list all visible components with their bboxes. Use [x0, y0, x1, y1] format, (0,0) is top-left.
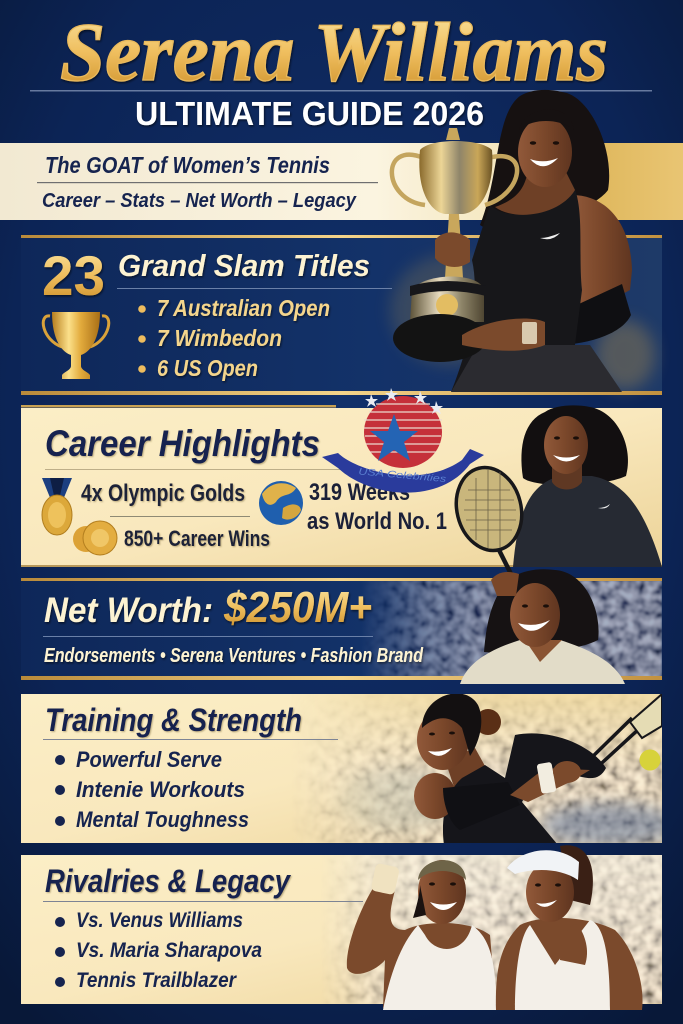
right player: [496, 845, 643, 1010]
icon: gold trophy: [43, 312, 109, 379]
photo: sisters smiling: [347, 845, 643, 1010]
skirt: [451, 345, 622, 392]
star emblem: [370, 414, 418, 461]
heading: rivalries and legacy: Rivalries & Legacy: [45, 863, 292, 899]
list: training: Intenie Workouts: [76, 777, 245, 802]
panel: net worth: [21, 569, 662, 684]
racket: [593, 694, 662, 764]
stat: olympic golds: 4x Olympic Golds: [81, 480, 245, 507]
stat: weeks at no. 1: [307, 479, 447, 535]
list: slam counts: 7 Wimbedon: [157, 325, 282, 351]
heading: career highlights: Career Highlights: [45, 423, 320, 464]
face: [518, 117, 572, 187]
title: Serena Williams: [60, 6, 608, 99]
stat: career wins: 850+ Career Wins: [124, 526, 270, 551]
racket: [448, 461, 530, 576]
heading: net worth: Net Worth:: [44, 591, 213, 630]
list: training: Powerful Serve: [76, 747, 222, 772]
hand holding racket: [491, 572, 519, 596]
list: rivalries: [55, 909, 262, 992]
big number 23: 23: [42, 244, 105, 307]
band heading: The GOAT of Women’s Tennis: [45, 152, 330, 178]
panel: rivalries and legacy: [21, 845, 662, 1010]
band: intro: [0, 143, 683, 220]
income sources: Endorsements • Serena Ventures • Fashion Brand: [44, 645, 424, 667]
torso and far sleeve: [443, 733, 606, 845]
panel: grand slam titles: [21, 235, 662, 395]
heading: net worth: [44, 583, 372, 632]
near sleeve: [443, 787, 456, 814]
hands: [435, 232, 470, 267]
icon: olympic medal: [42, 478, 72, 535]
forearm: [510, 768, 590, 802]
hair bun: [480, 709, 501, 735]
badge: USA Celebrities: USA Celebrities: [358, 466, 447, 485]
panel: career highlights: [21, 405, 662, 576]
photo: Serena in jacket: [460, 569, 625, 684]
badge: USA Celebrities: [322, 388, 484, 493]
list: slam counts: 6 US Open: [157, 355, 258, 381]
list: slam counts: [138, 295, 330, 381]
neck and chest: [495, 170, 575, 215]
heading: training and strength: Training & Strength: [45, 702, 302, 738]
tennis ball: [640, 750, 660, 770]
hair: [480, 90, 609, 230]
photo: Serena hitting backhand: [414, 693, 662, 845]
heading: net worth: $250M+: [223, 583, 372, 632]
photo: Serena with racket: [448, 405, 662, 576]
shoulder: [414, 773, 456, 819]
dress: [451, 183, 600, 392]
icon: globe: [259, 481, 303, 525]
photo: Serena holding trophy: [392, 90, 632, 392]
icon: gold coins: [73, 521, 117, 555]
subtitle: ULTIMATE GUIDE 2026: [135, 95, 484, 132]
list: training: [55, 747, 249, 832]
arm right: [572, 195, 632, 320]
neck: [448, 748, 484, 787]
heading: grand slam titles: Grand Slam Titles: [118, 248, 370, 283]
list: slam counts: 7 Australian Open: [157, 295, 330, 321]
panel: training and strength: [21, 693, 680, 847]
stat: weeks at no. 1: 319 Weeks: [309, 479, 410, 506]
face: [417, 718, 468, 770]
nike logo: [540, 233, 560, 239]
list: rivalries: Vs. Venus Williams: [76, 909, 243, 932]
list: training: Mental Toughness: [76, 807, 249, 832]
list: rivalries: Vs. Maria Sharapova: [76, 939, 262, 962]
list: rivalries: Tennis Trailblazer: [76, 969, 238, 992]
ribbon: [322, 449, 484, 493]
left player: [347, 860, 496, 1010]
band topics: Career – Stats – Net Worth – Legacy: [42, 190, 357, 212]
trophy: [392, 128, 517, 362]
stat: weeks at no. 1: as World No. 1: [307, 508, 447, 535]
